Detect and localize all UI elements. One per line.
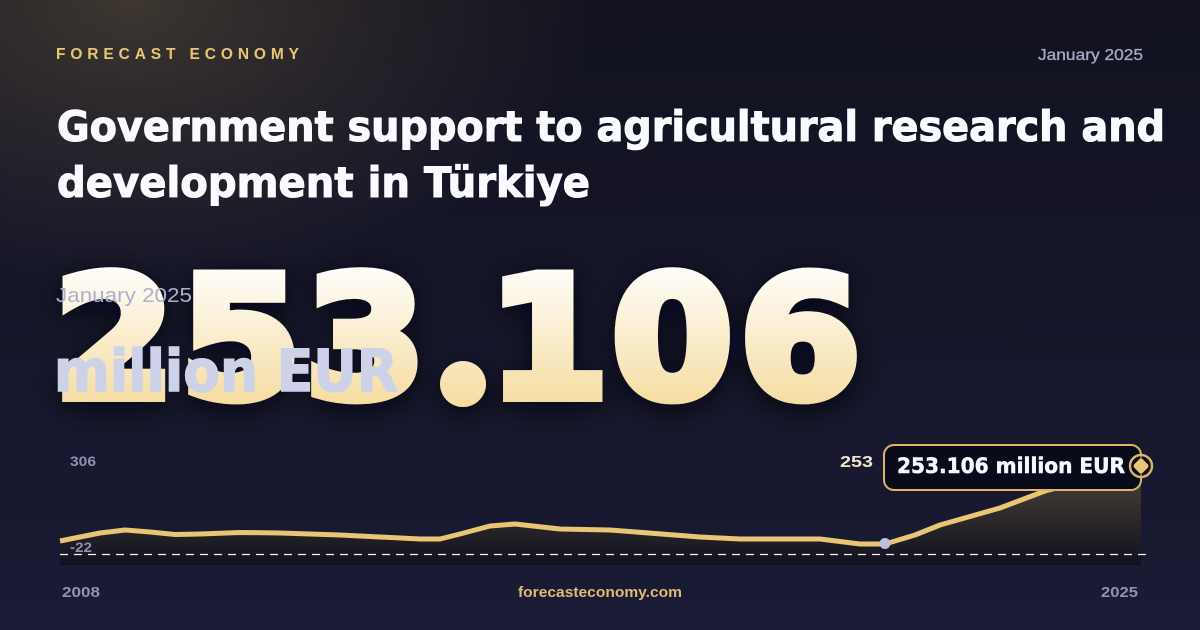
title — [57, 102, 1165, 207]
line chart — [60, 466, 1147, 565]
trend line — [60, 466, 1141, 544]
start year: 2008 — [62, 585, 100, 601]
title: development in Türkiye — [57, 158, 590, 207]
big value: 253.106 — [54, 242, 861, 437]
end year: 2025 — [1101, 585, 1138, 601]
area fill — [60, 466, 1141, 565]
unit overlapping value: million EUR — [54, 337, 398, 405]
website: forecasteconomy.com — [518, 585, 682, 601]
brand label: FORECAST ECONOMY — [56, 46, 300, 63]
date overlapping value: January 2025 — [56, 285, 192, 307]
axis min label: -22 — [70, 539, 92, 555]
endpoint marker — [1130, 455, 1152, 477]
title: Government support to agricultural research and — [57, 102, 1165, 151]
zero baseline — [60, 554, 1147, 556]
callout: 253.106 million EUR — [897, 454, 1125, 478]
axis max label: 306 — [70, 453, 96, 469]
date top right: January 2025 — [1038, 47, 1143, 64]
low point marker — [880, 538, 890, 549]
callout — [884, 445, 1141, 490]
current value axis label: 253 — [840, 454, 873, 471]
